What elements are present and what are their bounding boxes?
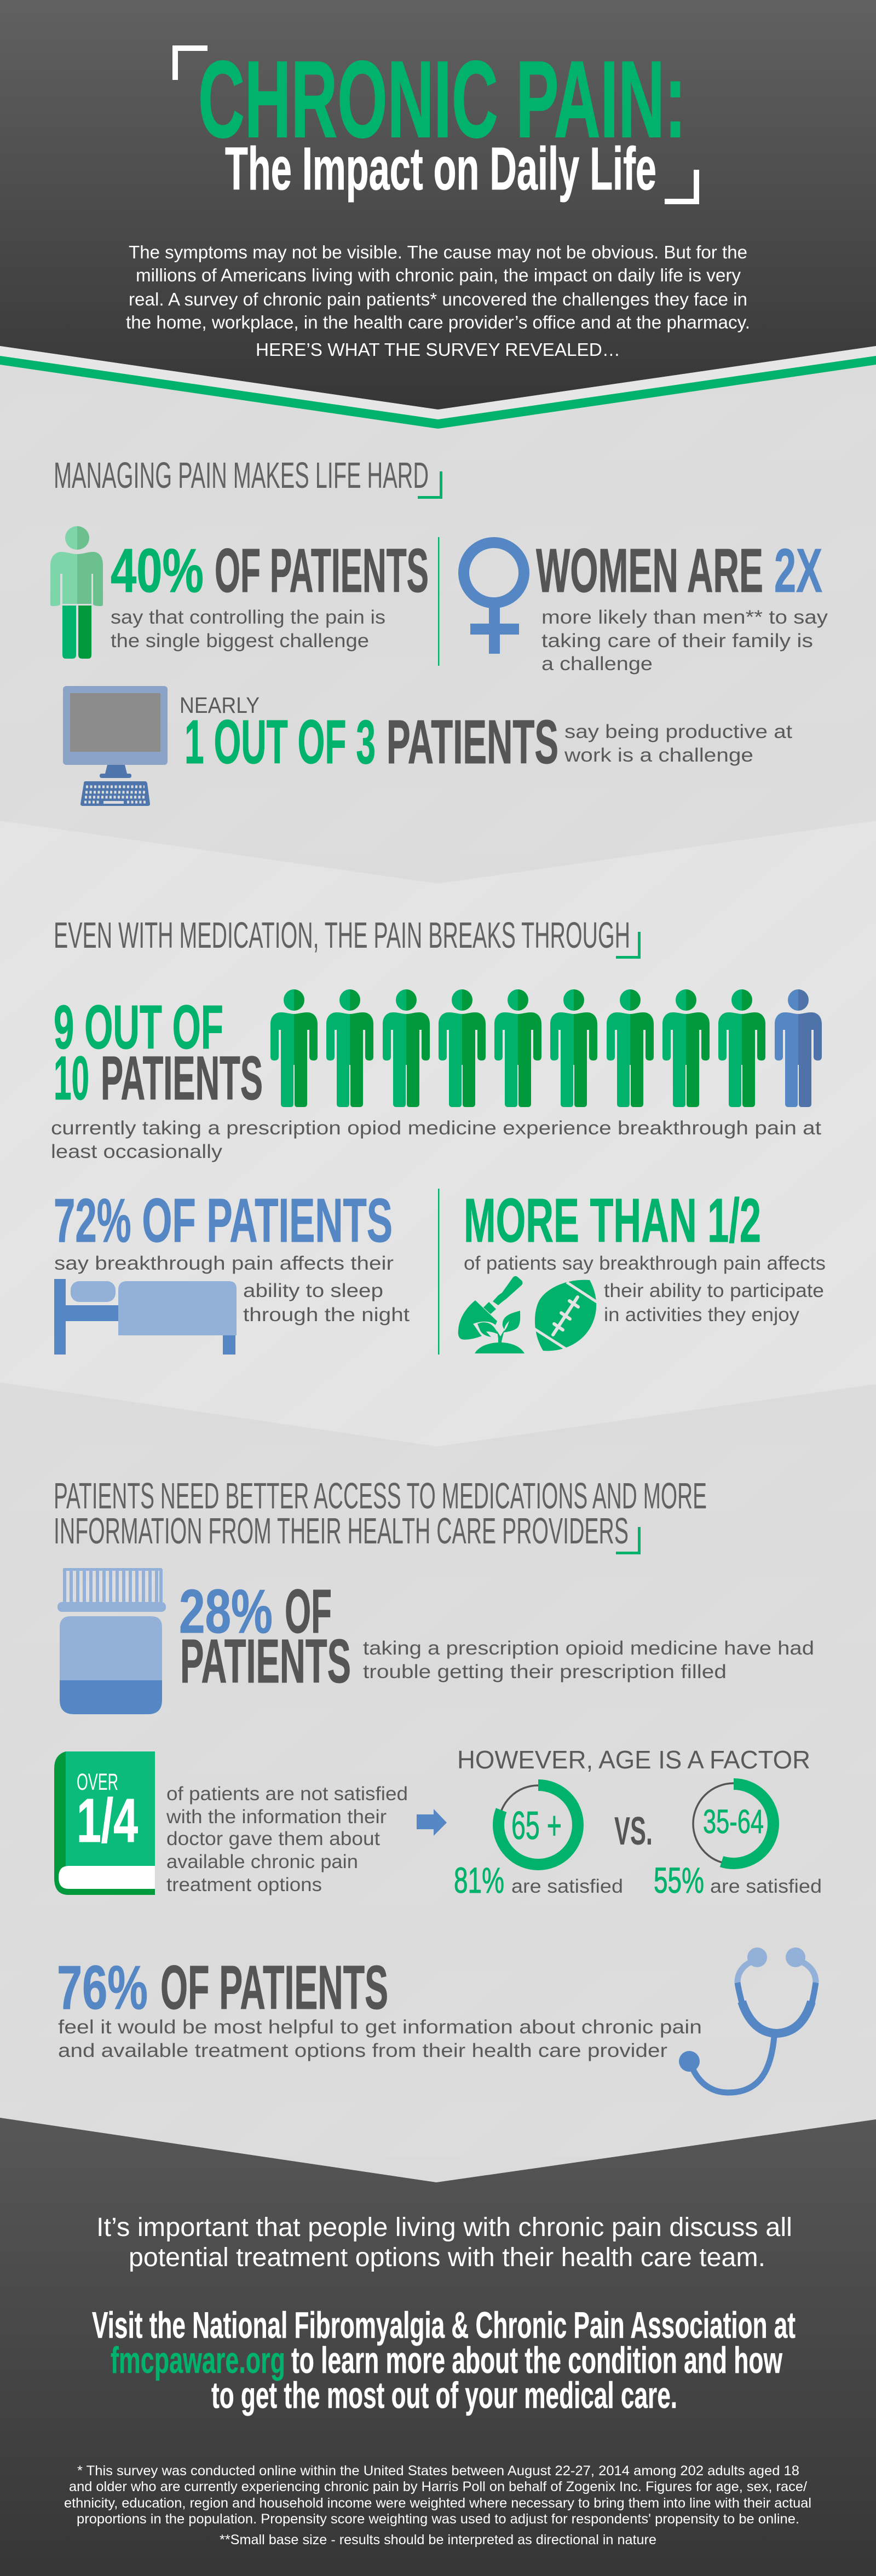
- book label: over: OVER: [77, 1769, 118, 1795]
- panel: footer: [0, 2118, 876, 2576]
- chevron: green ribbon: [0, 356, 876, 429]
- heading bracket: [418, 471, 442, 499]
- text: controlling pain: the single biggest challenge: [111, 630, 369, 652]
- stat: 9 out of 10 patients: 9 OUT OF: [54, 993, 223, 1062]
- text: not satisfied: of patients are not satisfied: [166, 1783, 408, 1805]
- footnotes: proportions in the population. Propensity score weighting was used to adjust for respondents' propensity to be online.: [77, 2511, 799, 2527]
- text: controlling pain: [111, 607, 385, 652]
- icon: shovel and plant: [458, 1276, 525, 1353]
- section heading: MANAGING PAIN MAKES LIFE HARD: [54, 455, 429, 496]
- text: prescription: taking a prescription opioid medicine have had: [363, 1638, 814, 1659]
- icon: person: [50, 526, 103, 659]
- panel: header: [0, 0, 876, 429]
- book label: 1/4: 1/4: [77, 1786, 138, 1855]
- bracket: title bottom right: [665, 170, 699, 204]
- stat: 9 out of 10 patients: PATIENTS: [101, 1044, 263, 1113]
- stat: 1 out of 3 patients: 1 OUT OF 3: [185, 707, 376, 776]
- text: sleep: [243, 1280, 410, 1326]
- panel: even with medication: [51, 915, 826, 1355]
- stat: 9 out of 10 patients: 10: [54, 1044, 89, 1113]
- text: not satisfied: [166, 1783, 408, 1895]
- label: nearly: NEARLY: [180, 693, 260, 718]
- text: helpful: feel it would be most helpful to get information about chronic pain: [58, 2016, 702, 2038]
- stat: 28% of patients: 28%: [179, 1577, 273, 1646]
- label: vs: VS.: [614, 1809, 653, 1853]
- footnotes: * This survey was conducted online within the United States between August 22-27, 2014 among 202 adults aged 18: [77, 2463, 799, 2479]
- text: not satisfied: doctor gave them about: [166, 1828, 380, 1849]
- stat: 76% of patients: OF PATIENTS: [160, 1953, 388, 2022]
- text: not satisfied: available chronic pain: [166, 1851, 358, 1872]
- label: 81% satisfied: [454, 1860, 623, 1900]
- footnotes: and older who are currently experiencing chronic pain by Harris Poll on behalf of Zogenix Inc. Figures for age, sex, race/: [69, 2479, 807, 2494]
- text: helpful: [58, 2016, 702, 2061]
- stat: 28% of patients: [179, 1577, 351, 1696]
- intro text: the home, workplace, in the health care provider’s office and at the pharmacy.: [126, 312, 750, 332]
- panel: managing pain makes life hard: [50, 455, 828, 806]
- text: women: more likely than men** to say: [541, 607, 828, 628]
- text: breakthrough: least occasionally: [51, 1141, 223, 1162]
- stat: 76% of patients: 76%: [57, 1953, 148, 2022]
- stat: 28% of patients: PATIENTS: [180, 1627, 351, 1696]
- icon: bed: [54, 1279, 237, 1355]
- icon: venus symbol: [464, 543, 524, 654]
- closing statement: [96, 2213, 792, 2272]
- stat: 40% of patients: OF PATIENTS: [215, 536, 429, 605]
- donut chart: 65+: [498, 1785, 578, 1865]
- text: not satisfied: with the information their: [166, 1806, 387, 1828]
- text: activities top: of patients say breakthrough pain affects: [464, 1253, 826, 1274]
- text: helpful: and available treatment options from their health care provider: [58, 2040, 667, 2061]
- donut chart: 35-64: [693, 1783, 774, 1864]
- text: women: taking care of their family is: [541, 630, 813, 652]
- footnotes: ethnicity, education, region and household income were weighted where necessary to bring them into line with their actual: [64, 2496, 811, 2511]
- text: prescription: [363, 1638, 814, 1682]
- label: 55% satisfied: 55%: [654, 1860, 704, 1900]
- intro text: HERE’S WHAT THE SURVEY REVEALED…: [256, 339, 620, 360]
- closing statement: It’s important that people living with chronic pain discuss all: [96, 2213, 792, 2242]
- footnotes: [64, 2463, 811, 2548]
- stat: 40% of patients: [111, 536, 429, 605]
- intro text: real. A survey of chronic pain patients* uncovered the challenges they face in: [129, 289, 747, 309]
- text: controlling pain: say that controlling the pain is: [111, 607, 385, 628]
- text: sleep top: say breakthrough pain affects their: [54, 1253, 394, 1274]
- intro text: The symptoms may not be visible. The cause may not be obvious. But for the: [129, 242, 747, 262]
- donut chart: 35-64: 35-64: [703, 1803, 764, 1840]
- text: activities: their ability to participate: [604, 1280, 824, 1301]
- text: activities: [604, 1280, 824, 1326]
- call to action: fmcpaware.org: [111, 2339, 285, 2381]
- intro text: [126, 242, 750, 360]
- arrow: [417, 1809, 447, 1836]
- label: 81% satisfied: are satisfied: [511, 1876, 623, 1897]
- stat: 76% of patients: [57, 1953, 388, 2022]
- heading bracket: [616, 932, 641, 959]
- text: breakthrough: [51, 1117, 821, 1162]
- stat: 9 out of 10 patients: [54, 993, 263, 1113]
- text: not satisfied: treatment options: [166, 1874, 322, 1895]
- call to action: [92, 2304, 796, 2416]
- icon row: ten people: [270, 989, 822, 1107]
- text: productive: work is a challenge: [564, 745, 753, 766]
- text: sleep: ability to sleep: [243, 1280, 383, 1301]
- icon: stethoscope: [679, 1947, 816, 2093]
- donut chart: 65+: 65 +: [511, 1804, 562, 1848]
- divider: [438, 1189, 439, 1355]
- heading: however, age is a factor: HOWEVER, AGE IS A FACTOR: [457, 1745, 810, 1774]
- closing statement: potential treatment options with their health care team.: [129, 2243, 765, 2272]
- icon: pill bottle: [57, 1568, 166, 1714]
- text: activities: in activities they enjoy: [604, 1304, 800, 1326]
- heading bracket: [616, 1527, 641, 1554]
- stat: 1 out of 3 patients: PATIENTS: [387, 707, 558, 776]
- divider: [438, 537, 439, 666]
- stat: 72% of patients: 72% OF PATIENTS: [54, 1186, 393, 1255]
- footnotes: **Small base size - results should be interpreted as directional in nature: [220, 2532, 656, 2548]
- bracket: title top left: [172, 45, 208, 80]
- label: 55% satisfied: are satisfied: [710, 1876, 822, 1897]
- label: 81% satisfied: 81%: [454, 1860, 504, 1900]
- label: 55% satisfied: [654, 1860, 822, 1900]
- stat: 28% of patients: OF: [285, 1577, 332, 1646]
- text: sleep: through the night: [243, 1304, 410, 1326]
- stat: 40% of patients: 40%: [111, 536, 204, 605]
- intro text: millions of Americans living with chronic pain, the impact on daily life is very: [136, 265, 741, 285]
- icon: computer: [63, 686, 168, 806]
- text: women: a challenge: [541, 653, 653, 675]
- stat: women are 2x: 2X: [774, 536, 822, 605]
- icon: football: [534, 1280, 597, 1351]
- section heading: [54, 1476, 707, 1552]
- text: breakthrough: currently taking a prescription opiod medicine experience breakthrough pain at: [51, 1117, 821, 1139]
- text: productive: [564, 721, 792, 766]
- text: prescription: trouble getting their prescription filled: [363, 1661, 727, 1682]
- text: women: [541, 607, 828, 675]
- icon: book with over 1/4: [54, 1751, 155, 1895]
- panel: access to medications: [54, 1476, 822, 2093]
- text: productive: say being productive at: [564, 721, 792, 742]
